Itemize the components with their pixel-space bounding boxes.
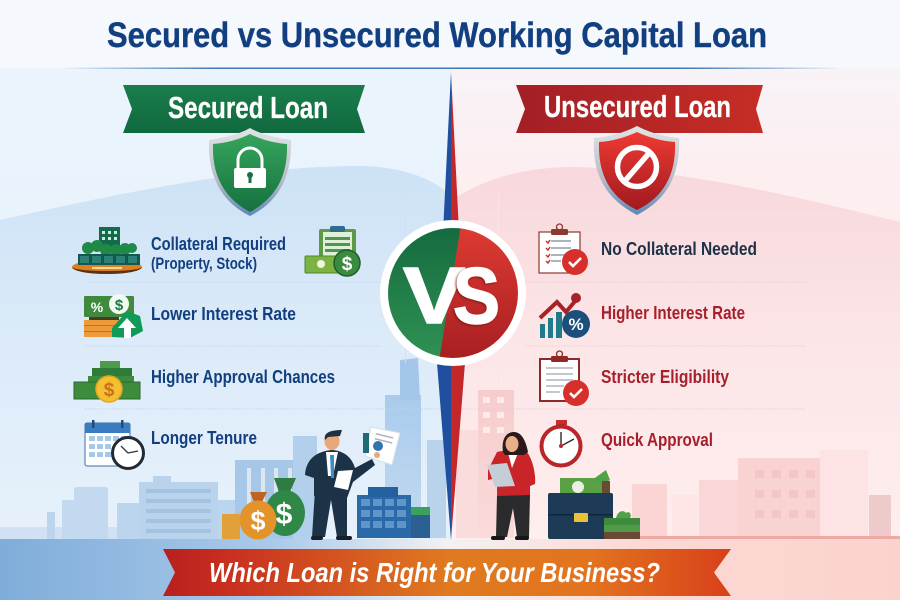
icon: rising chart with percent bbox=[540, 293, 590, 338]
illustration: money bags bbox=[222, 478, 305, 540]
title: Secured vs Unsecured Working Capital Loan bbox=[107, 16, 767, 55]
footer banner: Which Loan is Right for Your Business? bbox=[209, 557, 660, 588]
background: left side bbox=[0, 0, 451, 600]
icon: interest card with arrow: $ bbox=[115, 297, 124, 314]
text: higher approval chances: Higher Approval Chances bbox=[151, 367, 335, 387]
ground band bbox=[0, 539, 900, 600]
icon: checklist clipboard bbox=[539, 224, 588, 275]
text: quick approval: Quick Approval bbox=[601, 430, 713, 450]
illustration: briefcase and cash bbox=[548, 470, 640, 539]
item: stricter eligibility bbox=[540, 351, 729, 406]
VS badge: V bbox=[403, 251, 465, 340]
item: quick approval bbox=[542, 420, 713, 466]
banner: secured loan bbox=[123, 85, 365, 133]
background hill: right bbox=[455, 167, 900, 540]
dotted row dividers bbox=[85, 282, 805, 409]
icon: rising chart with percent: % bbox=[568, 315, 584, 334]
panel: secured loan bbox=[72, 85, 365, 468]
icon: cash and clipboard: $ bbox=[342, 254, 353, 275]
center divider: lower spike bbox=[436, 350, 466, 540]
text: higher interest rate: Higher Interest Rate bbox=[601, 303, 745, 323]
icon: green shield with padlock bbox=[209, 128, 291, 216]
panel: unsecured loan bbox=[516, 85, 763, 466]
item: lower interest rate bbox=[84, 294, 296, 338]
icon: interest card with arrow bbox=[84, 294, 143, 338]
item: longer tenure bbox=[85, 420, 257, 468]
illustration: money bags: $ bbox=[250, 506, 266, 536]
text: stricter eligibility: Stricter Eligibility bbox=[601, 367, 729, 387]
background: right side bbox=[451, 0, 900, 600]
icon: clipboard with check bbox=[540, 351, 589, 406]
text: longer tenure: Longer Tenure bbox=[151, 428, 257, 448]
center divider: upper spike bbox=[443, 72, 459, 232]
icon: cash and clipboard bbox=[305, 226, 360, 276]
item: no collateral needed bbox=[539, 224, 757, 275]
icon: cash stack with coin: $ bbox=[104, 380, 115, 401]
banner: unsecured loan bbox=[516, 85, 763, 133]
banner: secured loan: Secured Loan bbox=[168, 90, 328, 125]
text: property, stock: (Property, Stock) bbox=[151, 254, 257, 273]
skyline: left bbox=[0, 193, 446, 540]
icon: calendar and clock bbox=[85, 420, 144, 468]
background: title strip bbox=[0, 0, 900, 68]
skyline: right bbox=[456, 193, 900, 539]
illustration: blue office building bbox=[357, 487, 430, 538]
text: no collateral needed: No Collateral Needed bbox=[601, 239, 757, 259]
icon: stopwatch bbox=[542, 420, 580, 466]
icon: cash stack with coin bbox=[74, 361, 140, 402]
VS badge bbox=[380, 220, 526, 366]
illustration: money bags: $ bbox=[276, 498, 293, 531]
icon: red shield with prohibition sign bbox=[594, 126, 679, 215]
illustration: businesswoman bbox=[487, 432, 535, 540]
text: lower interest rate: Lower Interest Rate bbox=[151, 304, 296, 324]
title rule bbox=[60, 68, 840, 69]
item: higher interest rate bbox=[540, 293, 745, 338]
banner: unsecured loan: Unsecured Loan bbox=[544, 89, 731, 124]
icon: property bbox=[72, 227, 142, 274]
item: higher approval chances bbox=[74, 361, 335, 402]
text: collateral required: Collateral Required bbox=[151, 234, 286, 254]
footer banner bbox=[163, 549, 731, 596]
item: collateral required bbox=[72, 226, 360, 276]
VS badge: S bbox=[453, 251, 500, 340]
icon: interest card with arrow: % bbox=[91, 299, 104, 315]
illustration: businessman bbox=[305, 427, 400, 540]
background hill: left bbox=[0, 166, 447, 540]
